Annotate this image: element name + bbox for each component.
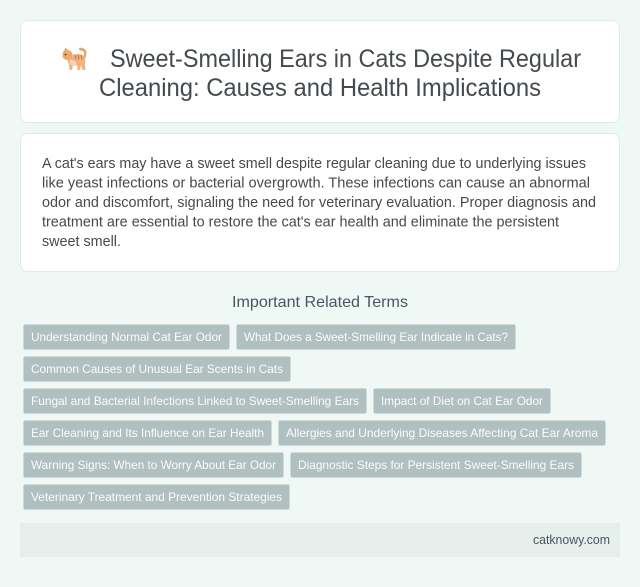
panel: related terms tags: Common Causes of Unusual Ear Scents in Cats [31,362,283,376]
panel: related terms tags: Diagnostic Steps for Persistent Sweet-Smelling Ears [298,458,574,472]
description text: sweet smell. [42,234,121,250]
description text: odor and discomfort, signaling the need for veterinary evaluation. Proper diagnosis and [42,195,596,211]
icon: cat [62,48,87,70]
description text [42,156,596,250]
panel: related terms tags: Impact of Diet on Cat Ear Odor [381,394,543,408]
description text: treatment are essential to restore the cat's ear health and eliminate the persistent [42,214,559,230]
panel: related terms tags [24,324,606,510]
panel: related terms tags: Understanding Normal Cat Ear Odor [31,330,222,344]
panel: related terms tags: Fungal and Bacterial Infections Linked to Sweet-Smelling Ears [31,394,359,408]
panel: description [20,134,620,272]
title [99,45,581,102]
panel: related terms tags: What Does a Sweet-Smelling Ear Indicate in Cats? [244,330,508,344]
heading: important related terms: Important Related Terms [232,294,408,311]
description text: like yeast infections or bacterial overgrowth. These infections can cause an abnormal [42,176,590,192]
panel: related terms tags: Veterinary Treatment and Prevention Strategies [31,490,282,504]
footer source: catknowy.com [533,533,610,547]
footer [20,523,620,557]
description text: A cat's ears may have a sweet smell despite regular cleaning due to underlying issues [42,156,586,172]
title: Cleaning: Causes and Health Implications [99,74,541,102]
panel: related terms tags: Warning Signs: When to Worry About Ear Odor [31,458,276,472]
title: Sweet-Smelling Ears in Cats Despite Regular [110,45,581,73]
panel: title card [20,20,620,122]
panel: related terms tags: Allergies and Underlying Diseases Affecting Cat Ear Aroma [286,426,598,440]
panel: related terms tags: Ear Cleaning and Its Influence on Ear Health [31,426,264,440]
